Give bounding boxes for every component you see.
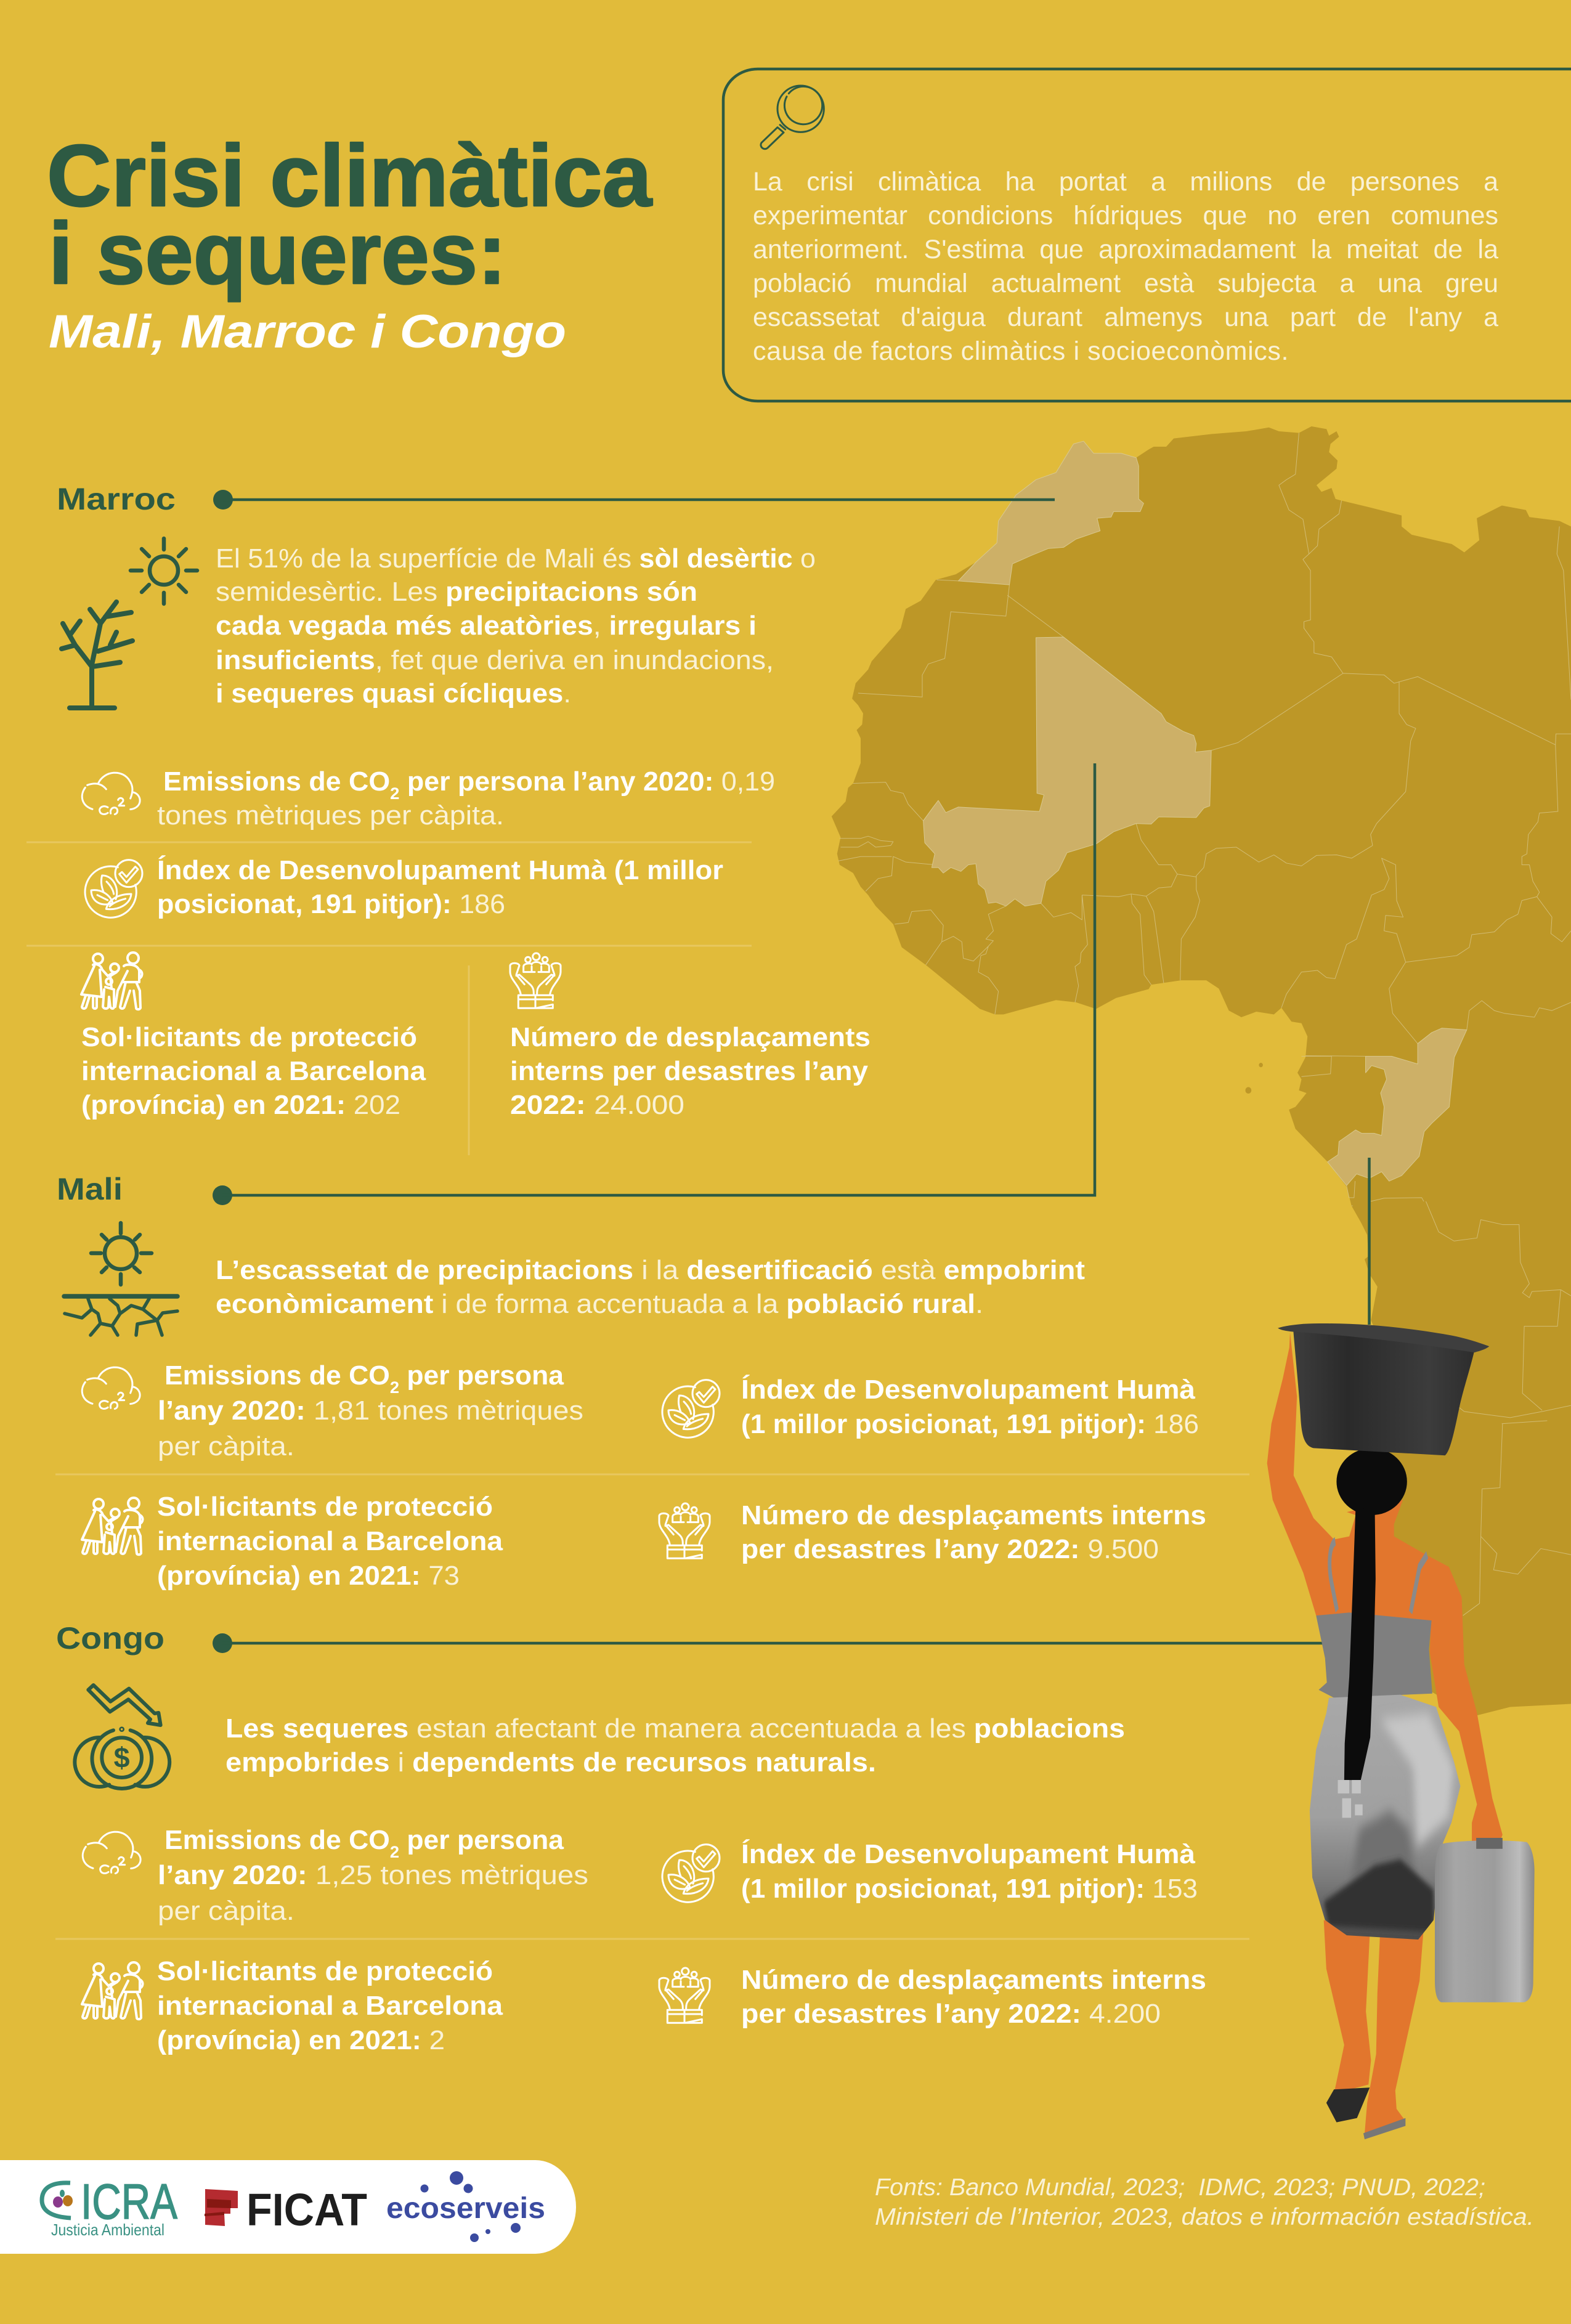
stat: CO2 emissions: 2 bbox=[390, 1843, 399, 1861]
map: Morocco highlight bbox=[959, 441, 1143, 585]
woman: hair bbox=[1336, 1448, 1407, 1780]
intro paragraph: experimentar condicions hídriques que no eren comunes bbox=[753, 201, 1498, 230]
stat: human development index: posicionat, 191 pitjor): 186 bbox=[157, 889, 505, 919]
logo: FICAT: FICAT bbox=[246, 2184, 367, 2235]
stat: human development index: (1 millor posicionat, 191 pitjor): 186 bbox=[741, 1409, 1199, 1439]
icon: sun bbox=[131, 538, 197, 604]
map: Republic of Congo highlight bbox=[1328, 1028, 1467, 1185]
icon: human development leaf bbox=[85, 860, 142, 917]
icon: human development leaf bbox=[662, 1845, 720, 1902]
stat: asylum seekers: (província) en 2021: 202 bbox=[81, 1090, 400, 1120]
stat: asylum seekers: Sol·licitants de protecció bbox=[157, 1956, 493, 1986]
illustration: woman carrying water bbox=[1267, 1323, 1535, 2139]
stat: CO2 emissions: l’any 2020: 1,25 tones mètriques bbox=[158, 1860, 588, 1890]
intro paragraph: causa de factors climàtics i socioeconòmics. bbox=[753, 336, 1289, 366]
stat: asylum seekers bbox=[157, 1956, 503, 2055]
icon: CO2 cloud bbox=[82, 1367, 140, 1409]
text: Mali summary bbox=[216, 1255, 1085, 1319]
text: Congo summary: Les sequeres estan afectant de manera accentuada a les poblacions bbox=[225, 1713, 1125, 1744]
map: southern land mass bbox=[1350, 1201, 1571, 1716]
heading: Congo: Congo bbox=[56, 1621, 164, 1656]
woman: hair beads bbox=[1338, 1780, 1363, 1818]
stat: internal displacements: Número de desplaçaments interns bbox=[741, 1500, 1206, 1530]
stat: human development index bbox=[741, 1838, 1198, 1904]
map: Mali highlight bbox=[924, 637, 1211, 906]
icon: magnifying glass bbox=[761, 86, 824, 149]
stat: asylum seekers bbox=[157, 1492, 503, 1591]
intro paragraph: anteriorment. S'estima que aproximadament la meitat de la bbox=[753, 235, 1498, 264]
section: Marroc bbox=[26, 482, 1055, 1155]
text: Marroc summary: El 51% de la superfície de Mali és sòl desèrtic o bbox=[216, 543, 816, 574]
stat: CO2 emissions: l’any 2020: 1,81 tones mètriques bbox=[158, 1396, 583, 1426]
stat: CO2 emissions: per persona l’any 2020: bbox=[399, 766, 713, 797]
text: Congo summary bbox=[225, 1713, 1125, 1778]
stat: CO2 emissions bbox=[158, 1825, 588, 1926]
stat: asylum seekers bbox=[81, 1022, 426, 1120]
stat: human development index: Índex de Desenvolupament Humà bbox=[741, 1374, 1196, 1405]
woman: dress straps bbox=[1329, 1542, 1427, 1612]
jerrycan bbox=[1435, 1838, 1535, 2002]
section: Congo bbox=[55, 1621, 1331, 2055]
stat: CO2 emissions: per càpita. bbox=[158, 1431, 294, 1461]
icon: asylum family bbox=[81, 953, 142, 1009]
icon: displacement hands bbox=[659, 1503, 710, 1558]
icon: dry tree bbox=[62, 602, 132, 708]
stat: human development index: Índex de Desenvolupament Humà bbox=[741, 1838, 1196, 1869]
connector line to Republic of Congo bbox=[1368, 1158, 1371, 1325]
stat: internal displacements bbox=[741, 1500, 1206, 1564]
stat: internal displacements: Número de desplaçaments interns bbox=[741, 1965, 1206, 1995]
stat: CO2 emissions: 0,19 bbox=[721, 766, 774, 797]
icon: falling money: $ bbox=[114, 1742, 130, 1774]
woman: skin bbox=[1267, 1333, 1503, 2133]
stat: CO2 emissions: per càpita. bbox=[158, 1896, 294, 1926]
logo: ecoserveis: ecoserveis bbox=[386, 2192, 545, 2225]
section: Mali bbox=[55, 763, 1249, 1591]
logo: CICRA: Justicia Ambiental bbox=[51, 2220, 164, 2239]
stat: CO2 emissions: tones mètriques per càpita. bbox=[157, 800, 504, 831]
water basin bbox=[1278, 1323, 1489, 1455]
title: Crisi climàtica bbox=[47, 127, 652, 225]
stat: CO2 emissions: Emissions de CO bbox=[163, 766, 390, 797]
stat: CO2 emissions bbox=[158, 1360, 583, 1461]
stat: CO2 emissions: Emissions de CO bbox=[164, 1825, 388, 1855]
icon: asylum family bbox=[82, 1962, 143, 2019]
intro paragraph bbox=[753, 167, 1498, 366]
title bbox=[47, 127, 652, 303]
logo: ecoserveis bbox=[386, 2171, 545, 2242]
stat: internal displacements: 2022: 24.000 bbox=[510, 1090, 684, 1120]
text: Marroc summary: semidesèrtic. Les precipitacions són bbox=[216, 577, 697, 607]
text: Mali summary: L’escassetat de precipitacions i la desertificació està empobrint bbox=[216, 1255, 1085, 1285]
sources: Fonts: Banco Mundial, 2023; IDMC, 2023; PNUD, 2022; bbox=[875, 2174, 1485, 2201]
stat: human development index bbox=[157, 855, 723, 919]
logo: FICAT bbox=[205, 2184, 367, 2235]
sources: Ministeri de l’Interior, 2023, datos e información estadística. bbox=[875, 2204, 1534, 2230]
stat: asylum seekers: internacional a Barcelona bbox=[81, 1056, 426, 1086]
stat: asylum seekers: (província) en 2021: 2 bbox=[157, 2025, 445, 2055]
intro paragraph: escassetat d'aigua durant almenys una part de l'any a bbox=[753, 303, 1498, 332]
stat: CO2 emissions bbox=[157, 766, 775, 831]
stat: internal displacements: Número de desplaçaments bbox=[510, 1022, 871, 1052]
stat: CO2 emissions: per persona bbox=[399, 1825, 564, 1855]
icon: falling money bbox=[75, 1685, 169, 1789]
stat: CO2 emissions: 2 bbox=[390, 1378, 399, 1397]
stat: internal displacements: per desastres l’any 2022: 4.200 bbox=[741, 1999, 1161, 2029]
connector line to Mali bbox=[213, 763, 1095, 1205]
icon: displacement hands bbox=[510, 953, 561, 1008]
stat: human development index: (1 millor posicionat, 191 pitjor): 153 bbox=[741, 1874, 1198, 1904]
text: Marroc summary: i sequeres quasi cícliques . bbox=[216, 678, 571, 709]
stat: human development index bbox=[741, 1374, 1199, 1439]
map of West and Central Africa bbox=[832, 426, 1571, 1716]
map: northern and western land mass bbox=[832, 426, 1571, 1232]
stat: internal displacements: per desastres l’any 2022: 9.500 bbox=[741, 1534, 1159, 1564]
stat: asylum seekers: Sol·licitants de protecció bbox=[81, 1022, 417, 1052]
text: Marroc summary: insuficients , fet que deriva en inundacions, bbox=[216, 645, 774, 675]
text: Marroc summary bbox=[216, 543, 816, 709]
text: Mali summary: econòmicament i de forma accentuada a la població rural . bbox=[216, 1289, 983, 1319]
stat: CO2 emissions: Emissions de CO bbox=[164, 1360, 388, 1391]
icon: human development leaf bbox=[662, 1380, 720, 1437]
stat: internal displacements: interns per desastres l’any bbox=[510, 1056, 869, 1086]
logo bar bbox=[0, 2160, 576, 2254]
woman: skirt bbox=[1310, 1695, 1460, 1940]
sources bbox=[875, 2174, 1534, 2230]
stat: asylum seekers: Sol·licitants de protecció bbox=[157, 1492, 493, 1522]
connector line to Congo bbox=[213, 1633, 1331, 1653]
heading: Marroc: Marroc bbox=[57, 482, 176, 516]
subtitle: Mali, Marroc i Congo bbox=[49, 306, 566, 358]
stat: internal displacements bbox=[510, 1022, 871, 1120]
connector line to Morocco bbox=[213, 490, 1055, 510]
heading: Mali: Mali bbox=[57, 1172, 123, 1206]
intro paragraph: població mundial actualment està subjecta a una greu bbox=[753, 269, 1498, 298]
text: Marroc summary: cada vegada més aleatòries , irregulars i bbox=[216, 611, 757, 641]
woman: dress bodice bbox=[1316, 1612, 1432, 1698]
logo: CICRA bbox=[42, 2174, 177, 2239]
stat: CO2 emissions: per persona bbox=[399, 1360, 564, 1391]
stat: human development index: Índex de Desenvolupament Humà (1 millor bbox=[157, 855, 723, 885]
text: Congo summary: empobrides i dependents de recursos naturals. bbox=[225, 1747, 876, 1778]
icon: CO2 cloud bbox=[83, 1832, 140, 1874]
intro paragraph: La crisi climàtica ha portat a milions de persones a bbox=[753, 167, 1498, 197]
icon: asylum family bbox=[82, 1498, 143, 1554]
stat: asylum seekers: internacional a Barcelona bbox=[157, 1991, 503, 2021]
woman: shoes bbox=[1326, 2087, 1405, 2139]
icon: sun and cracked ground bbox=[64, 1223, 177, 1335]
stat: asylum seekers: internacional a Barcelona bbox=[157, 1526, 503, 1556]
title: i sequeres: bbox=[49, 205, 506, 303]
icon: CO2 cloud bbox=[82, 773, 140, 815]
stat: internal displacements bbox=[741, 1965, 1206, 2029]
panel: intro box outline bbox=[723, 69, 1571, 401]
stat: CO2 emissions: 2 bbox=[390, 784, 399, 803]
icon: displacement hands bbox=[659, 1968, 710, 2023]
logo: CICRA: ICRA bbox=[81, 2174, 177, 2230]
stat: asylum seekers: (província) en 2021: 73 bbox=[157, 1561, 460, 1591]
